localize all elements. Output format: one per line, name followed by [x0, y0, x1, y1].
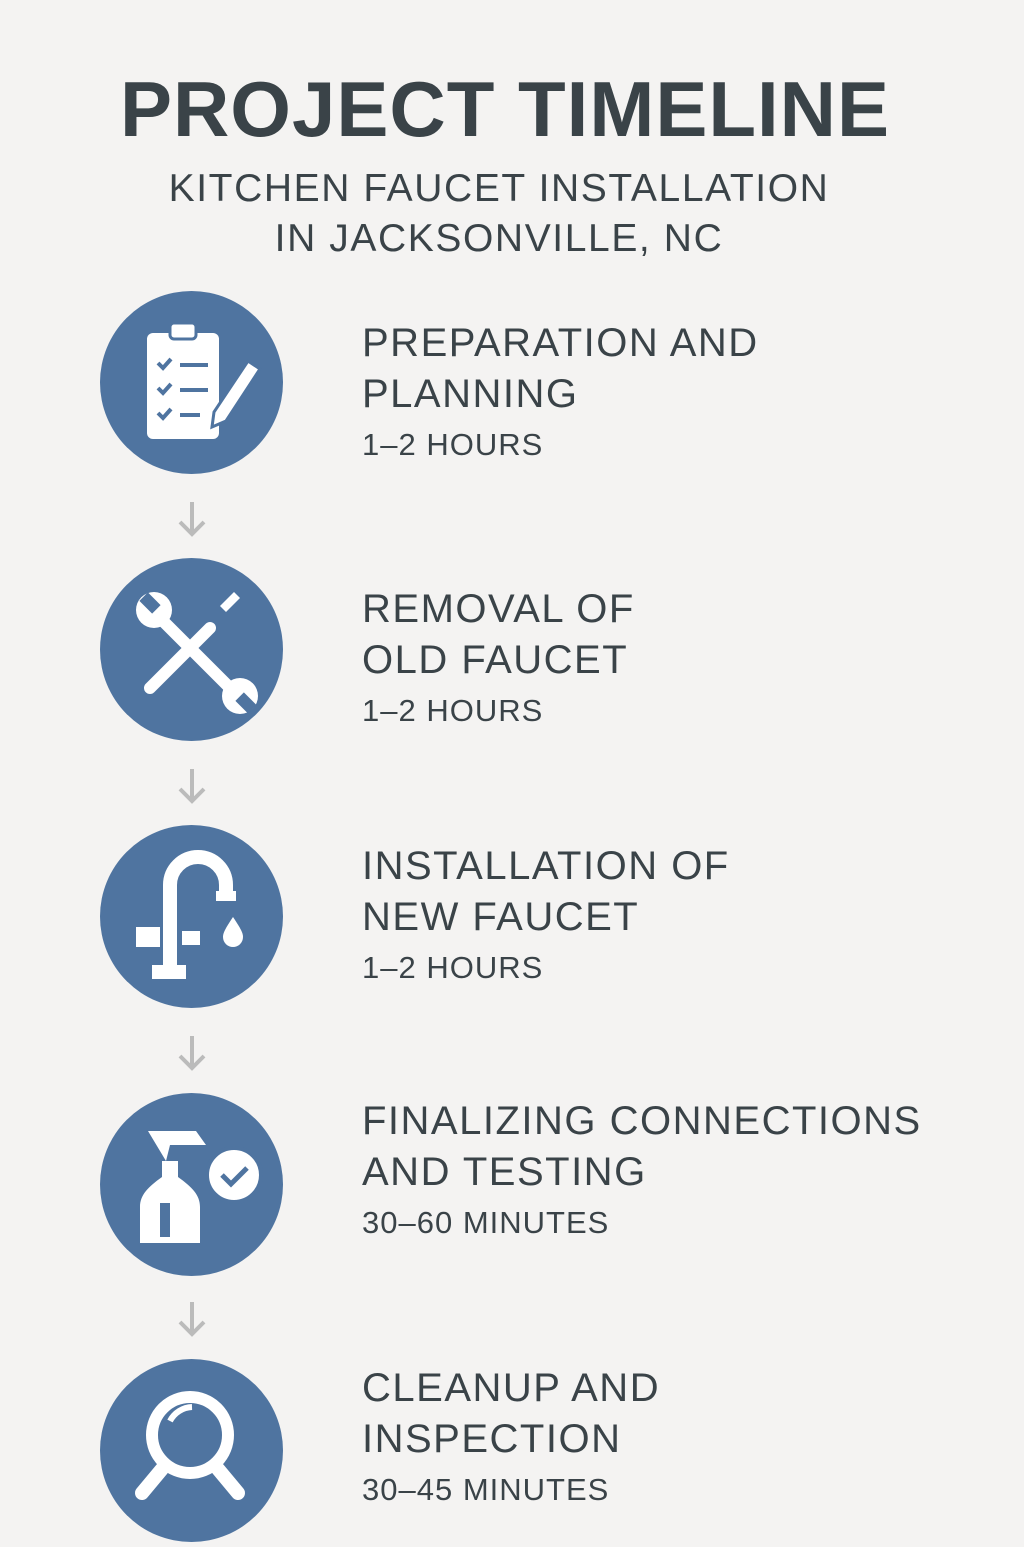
step 1 text: PLANNING: [362, 372, 578, 416]
step 4 text: AND TESTING: [362, 1150, 647, 1194]
subtitle: KITCHEN FAUCET INSTALLATION: [169, 167, 829, 210]
arrow 2: [178, 769, 206, 804]
arrow 1: [178, 502, 206, 537]
arrow 3: [178, 1036, 206, 1071]
step 2 text: 1–2 HOURS: [362, 693, 543, 728]
step 5 text: [362, 1366, 660, 1507]
step 5 text: 30–45 MINUTES: [362, 1472, 609, 1507]
icon: magnifier: [100, 1359, 283, 1542]
step 1 text: [362, 321, 759, 462]
step 2 text: [362, 587, 635, 728]
step 4 text: [362, 1099, 922, 1240]
step 3 text: [362, 844, 730, 985]
subtitle: IN JACKSONVILLE, NC: [275, 217, 723, 260]
step 2 text: OLD FAUCET: [362, 638, 628, 682]
step 1 text: PREPARATION AND: [362, 321, 759, 365]
icon: faucet: [100, 825, 283, 1008]
step 5 text: INSPECTION: [362, 1417, 621, 1461]
icon: clipboard: [100, 291, 283, 474]
step 3 text: 1–2 HOURS: [362, 950, 543, 985]
subtitle: [169, 167, 829, 260]
step 1 text: 1–2 HOURS: [362, 427, 543, 462]
title: PROJECT TIMELINE: [120, 65, 890, 153]
icon: spray bottle: [100, 1093, 283, 1276]
step 3 text: NEW FAUCET: [362, 895, 639, 939]
step 2 text: REMOVAL OF: [362, 587, 635, 631]
step 5 text: CLEANUP AND: [362, 1366, 660, 1410]
step 4 text: 30–60 MINUTES: [362, 1205, 609, 1240]
arrow 4: [178, 1302, 206, 1337]
step 3 text: INSTALLATION OF: [362, 844, 730, 888]
icon: tools: [100, 558, 283, 741]
step 4 text: FINALIZING CONNECTIONS: [362, 1099, 922, 1143]
